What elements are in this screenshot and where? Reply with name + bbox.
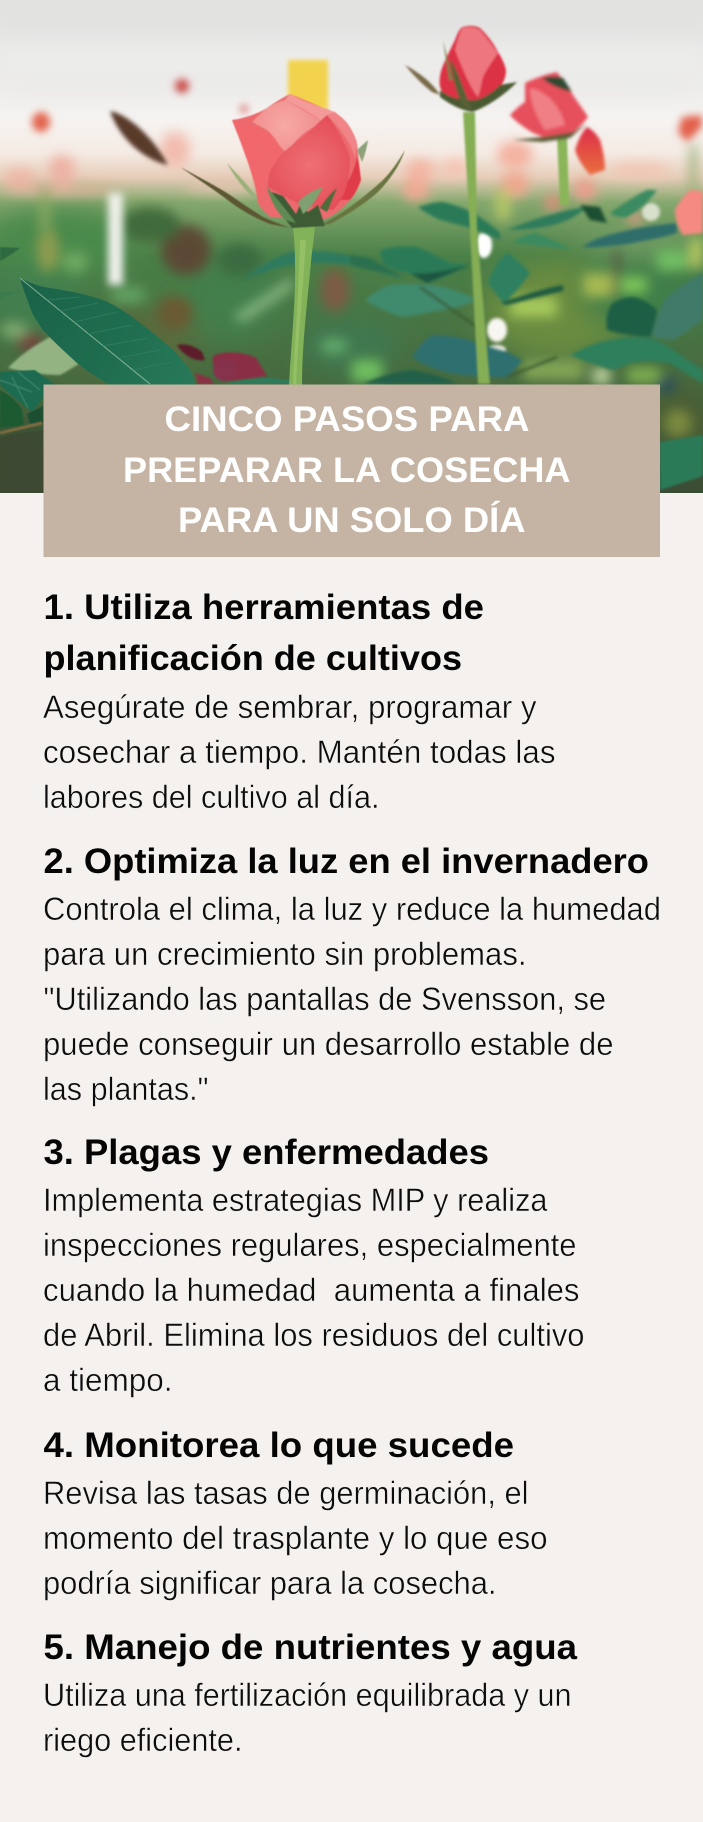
yellow sign [288, 60, 328, 110]
step 2 body: puede conseguir un desarrollo estable de [43, 1026, 614, 1062]
rose: main bloom [232, 94, 361, 220]
soft background leaves [242, 190, 703, 384]
step 1 heading: planificación de cultivos [44, 638, 462, 678]
step 1 body [43, 689, 556, 815]
rose: main stem [289, 226, 315, 385]
step 2 body: para un crecimiento sin problemas. [43, 936, 526, 972]
step 3 body: inspecciones regulares, especialmente [43, 1227, 576, 1263]
step 5 body: riego eficiente. [43, 1722, 242, 1758]
photo: rose greenhouse [0, 0, 703, 500]
rose: main sepals and calyx [180, 140, 405, 228]
left leaves [0, 246, 55, 440]
pale leaf behind [8, 337, 80, 375]
small distant red buds [32, 79, 702, 142]
step 1 body: cosechar a tiempo. Mantén todas las [43, 734, 556, 770]
big serrated leaf [20, 278, 195, 385]
title text: CINCO PASOS PARA [164, 400, 530, 439]
step 3 body: a tiempo. [43, 1362, 172, 1398]
title text: PARA UN SOLO DÍA [178, 500, 526, 540]
step 3 heading: 3. Plagas y enfermedades [44, 1132, 489, 1172]
step 3 body: de Abril. Elimina los residuos del cultivo [43, 1317, 584, 1353]
step 5 heading: 5. Manejo de nutrientes y agua [44, 1627, 577, 1667]
blurred pink and green background [0, 208, 703, 500]
leaves right of title box [660, 435, 703, 490]
step 2 body [43, 891, 661, 1107]
dark brown blurred leaf [110, 111, 168, 165]
step 4 heading: 4. Monitorea lo que sucede [44, 1425, 514, 1465]
step 4 body: podría significar para la cosecha. [43, 1565, 496, 1601]
title text: PREPARAR LA COSECHA [123, 451, 570, 490]
step 5 [43, 1627, 577, 1758]
step 1 heading [44, 587, 484, 678]
step 1 heading: 1. Utiliza herramientas de [44, 587, 484, 627]
step 5 body: Utiliza una fertilización equilibrada y un [43, 1677, 572, 1713]
rose: back right [405, 26, 517, 112]
step 5 body [43, 1677, 572, 1758]
step 4 body [43, 1475, 548, 1601]
step 2 body: "Utilizando las pantallas de Svensson, se [44, 981, 606, 1017]
step 3 body [43, 1182, 584, 1398]
step 4 [43, 1425, 548, 1601]
step 2 body: las plantas." [43, 1071, 208, 1107]
step 2 [43, 841, 661, 1107]
blurred pink blooms in distance [0, 132, 697, 230]
back stems [463, 112, 569, 384]
step 2 heading: 2. Optimiza la luz en el invernadero [44, 841, 649, 881]
rose: right edge [675, 190, 703, 235]
step 3 body: Implementa estrategias MIP y realiza [43, 1182, 548, 1218]
step 1 body: Asegúrate de sembrar, programar y [43, 689, 536, 725]
step 3 [43, 1132, 584, 1398]
step 4 body: Revisa las tasas de germinación, el [43, 1475, 528, 1511]
thin leaf at box edge [223, 378, 307, 384]
dark red shoots [177, 344, 267, 384]
title box [44, 384, 660, 557]
white bokeh spots [476, 203, 660, 355]
blurred detail patches [0, 207, 703, 437]
blurred sky bands [0, 18, 703, 86]
step 1 body: labores del cultivo al día. [43, 779, 380, 815]
step 1 [43, 587, 556, 815]
step 4 body: momento del trasplante y lo que eso [43, 1520, 548, 1556]
rose: back far right [510, 72, 605, 175]
white sign post [108, 193, 123, 285]
step 2 body: Controla el clima, la luz y reduce la humedad [43, 891, 661, 927]
step 3 body: cuando la humedad aumenta a finales [43, 1272, 580, 1308]
title text [123, 400, 570, 540]
